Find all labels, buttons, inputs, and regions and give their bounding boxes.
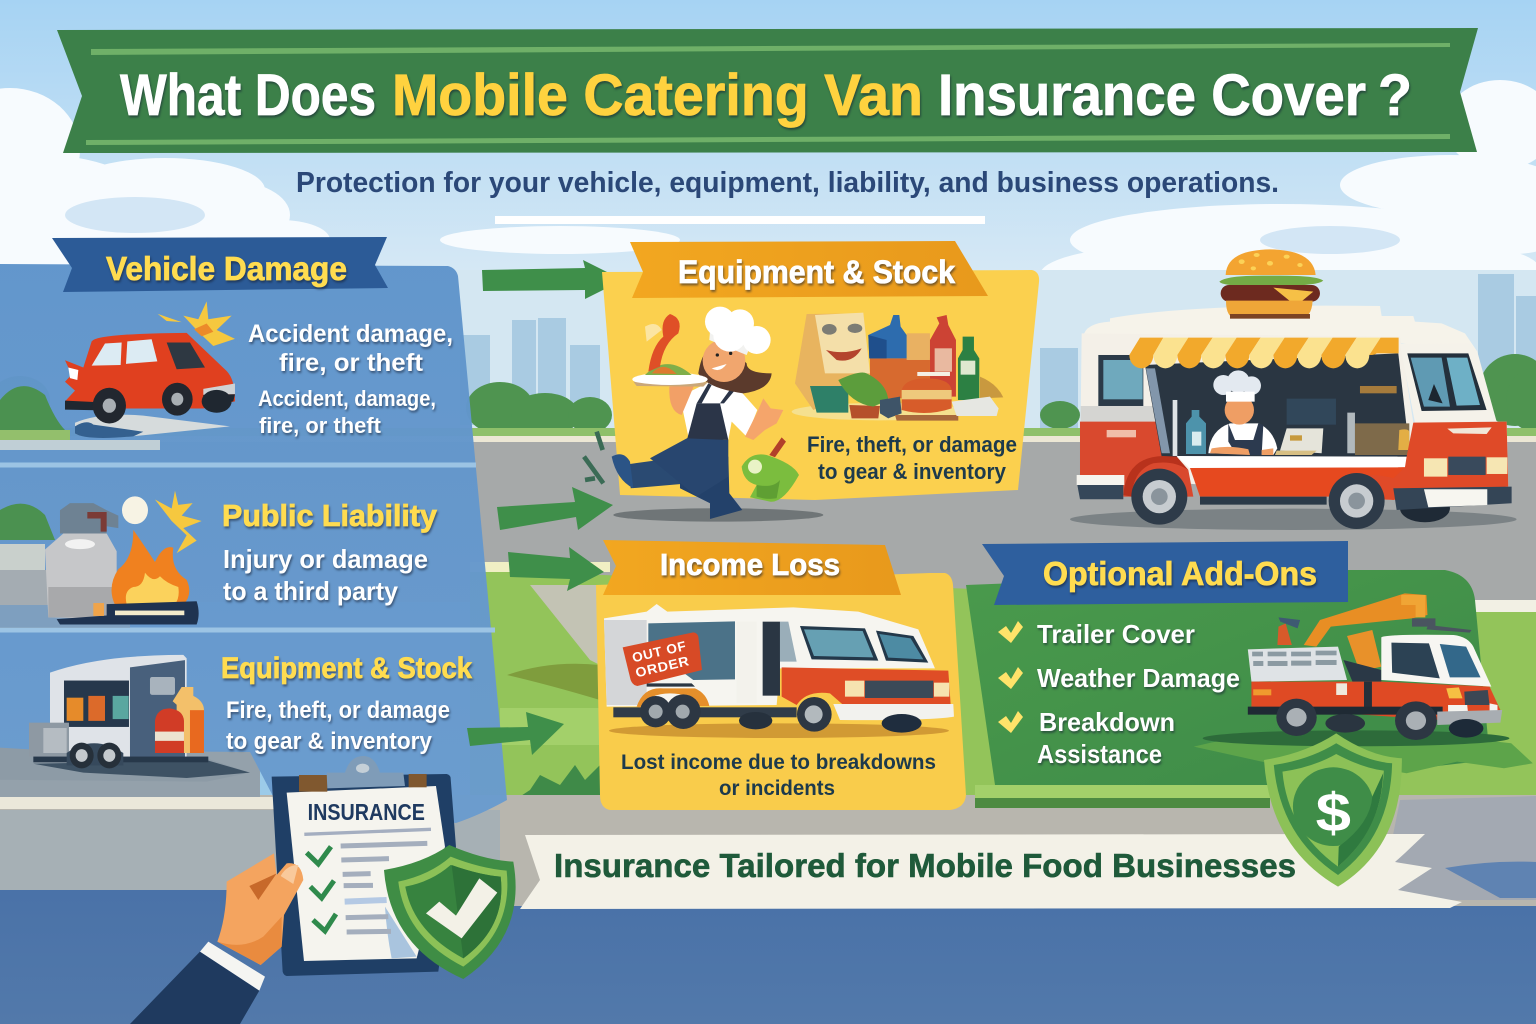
title text: ? <box>1378 63 1412 128</box>
text: vehicle damage description: fire, or theft <box>259 413 382 438</box>
text: public liability: Public Liability <box>222 498 438 533</box>
illustration: broken down van <box>604 604 954 738</box>
icon: burger <box>1219 249 1323 319</box>
text: equipment description: to gear & inventory <box>818 459 1007 484</box>
text: equipment and stock: to gear & inventory <box>226 728 433 755</box>
panel: optional add-ons <box>966 541 1533 808</box>
text: income loss description: Lost income due to breakdowns <box>621 751 936 774</box>
title text: Insurance Cover <box>938 63 1366 128</box>
subtitle: Protection for your vehicle, equipment, liability, and business operations. <box>296 167 1279 199</box>
food truck with burger <box>1070 249 1517 530</box>
text: income loss description: or incidents <box>719 777 835 800</box>
illustration: chef carrying food and slipping <box>584 307 823 522</box>
sign: out of order: OUT OF <box>631 638 688 665</box>
icon: dollar shield: $ <box>1316 783 1351 844</box>
title text: What Does <box>120 63 376 128</box>
text: public liability: to a third party <box>223 576 399 606</box>
awning <box>1129 338 1399 368</box>
sign: out of order <box>623 632 702 686</box>
checklist: add-ons: Trailer Cover <box>1037 619 1195 649</box>
checklist: add-ons: Weather Damage <box>1037 663 1240 693</box>
icon: crashed red car <box>65 301 235 438</box>
text: vehicle damage description: fire, or theft <box>279 349 424 377</box>
clipboard: INSURANCE <box>308 799 425 825</box>
arrow: to equipment and stock <box>482 260 623 299</box>
ribbon: equipment and stock: Equipment & Stock <box>678 254 955 290</box>
ribbon: Vehicle Damage: Vehicle Damage <box>106 250 347 287</box>
ribbon: Vehicle Damage <box>52 237 388 292</box>
icon: dollar shield <box>1264 733 1402 887</box>
checklist: add-ons: Breakdown <box>1039 707 1175 737</box>
arrow: to equipment panel lower <box>497 487 613 530</box>
title text: Mobile Catering Van <box>392 63 923 128</box>
illustration: hand holding insurance clipboard with shield <box>130 756 516 1024</box>
panel: equipment and stock <box>584 241 1039 522</box>
text: vehicle damage description <box>248 320 453 438</box>
ribbon: equipment and stock <box>630 241 988 298</box>
text: equipment description: Fire, theft, or damage <box>807 432 1017 457</box>
arrow: to optional add-ons <box>467 712 564 755</box>
bottom banner <box>520 834 1462 909</box>
ribbon: income loss: Income Loss <box>660 547 840 582</box>
text: equipment and stock: Equipment & Stock <box>221 652 472 685</box>
title text <box>120 63 1412 128</box>
ribbon: income loss <box>603 540 901 595</box>
text: public liability: Injury or damage <box>223 544 428 574</box>
icon: green check shield <box>384 845 516 979</box>
clipboard <box>272 756 456 976</box>
icon: gas cylinder and fire <box>45 491 202 624</box>
text: vehicle damage description: Accident, damage, <box>258 386 436 411</box>
title banner <box>57 28 1478 153</box>
arrow: to income loss <box>508 547 604 591</box>
panel: left coverage column <box>0 237 507 823</box>
hand and sleeve <box>130 853 303 1024</box>
text: income loss description <box>621 751 936 800</box>
bottom banner: Insurance Tailored for Mobile Food Businesses <box>554 847 1296 884</box>
sign: out of order: ORDER <box>634 653 691 680</box>
text: vehicle damage description: Accident damage, <box>248 320 453 348</box>
text: public liability <box>222 498 438 606</box>
checklist: add-ons: Assistance <box>1037 739 1162 769</box>
text: equipment and stock <box>221 652 472 755</box>
panel: income loss <box>596 540 966 810</box>
icon: catering trailer with bottles <box>0 655 250 782</box>
text: equipment and stock: Fire, theft, or damage <box>226 697 450 724</box>
ribbon: optional add-ons <box>982 541 1348 605</box>
checklist: add-ons <box>998 619 1240 769</box>
text: equipment description <box>807 432 1017 484</box>
illustration: groceries and stock <box>792 313 1003 421</box>
illustration: recovery truck <box>1194 593 1533 773</box>
ribbon: optional add-ons: Optional Add-Ons <box>1043 555 1317 592</box>
